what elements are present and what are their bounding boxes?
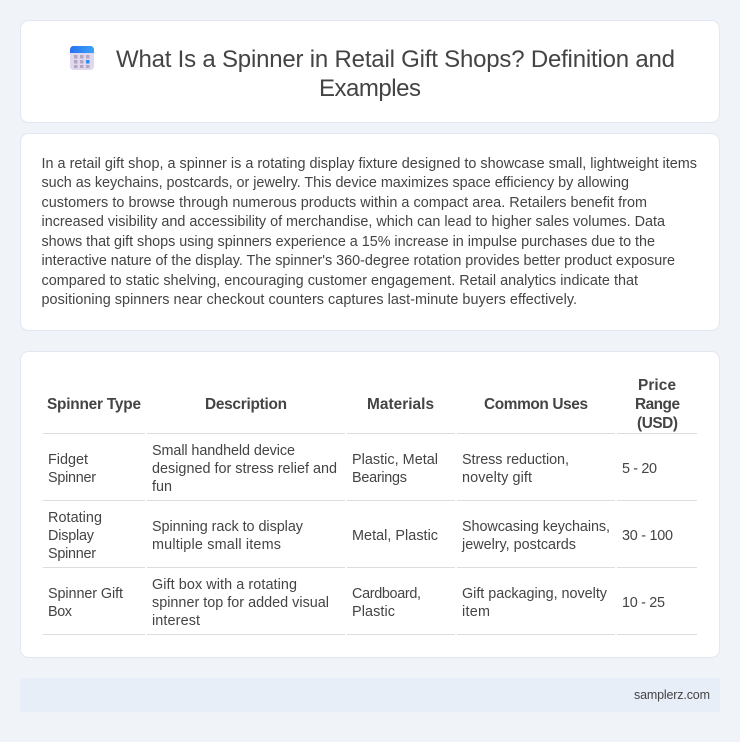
table header row: Description (205, 396, 287, 413)
table row: rotating display spinner: Spinner (48, 546, 96, 562)
table row: fidget spinner: Spinner (48, 470, 96, 486)
table row: spinner gift box (48, 577, 665, 629)
table row: rotating display spinner: Showcasing keychains, (462, 519, 610, 535)
table row: fidget spinner (48, 443, 657, 495)
table row: fidget spinner: novelty gift (462, 470, 532, 486)
text block: definition: shows that gift shops using spinners experience a 15% increase in impulse purchases due to the (42, 234, 655, 250)
table row: spinner gift box: Plastic (352, 604, 395, 620)
table row: rotating display spinner: jewelry, postcards (461, 537, 576, 553)
table header row: (USD) (637, 415, 678, 432)
table row: rotating display spinner: Spinning rack to display (152, 519, 304, 535)
text block: definition: positioning spinners near checkout counters captures last-minute buyers effectively. (42, 292, 577, 308)
table row: rotating display spinner: multiple small items (152, 537, 281, 553)
table row: spinner gift box: Gift packaging, novelty (462, 586, 608, 602)
text block: definition: In a retail gift shop, a spinner is a rotating display fixture designed to showcase small, lightweight items (42, 156, 697, 172)
table row: rotating display spinner: Rotating (48, 510, 102, 526)
table row: rotating display spinner: Metal, Plastic (352, 528, 438, 544)
panel: spinner types table (20, 352, 720, 658)
table row: spinner gift box: item (462, 604, 490, 620)
table row: spinner gift box: 10 - 25 (622, 595, 665, 611)
table row: fidget spinner: Plastic, Metal (352, 452, 438, 468)
text block: definition (42, 156, 697, 308)
table row: fidget spinner: designed for stress relief and (152, 461, 337, 477)
text block: definition: interactive nature of the display. The spinner's 360-degree rotation provides better product exposure (42, 253, 675, 269)
table row: spinner gift box: spinner top for added visual (152, 595, 329, 611)
table row: fidget spinner: 5 - 20 (622, 461, 657, 477)
title (116, 46, 675, 102)
table header row: Range (635, 396, 680, 413)
table row: fidget spinner: Stress reduction, (462, 452, 569, 468)
table row: spinner gift box: interest (152, 613, 200, 629)
table header row: Common Uses (484, 396, 588, 413)
table row: spinner gift box: Cardboard, (352, 586, 421, 602)
title: Examples (319, 75, 421, 102)
table row: spinner gift box: Spinner Gift (48, 586, 123, 602)
text block: definition: such as keychains, postcards, or jewelry. This device maximizes space efficiency by allowing (42, 175, 629, 191)
text block: definition: customers to browse through numerous products within a compact area. Retailers benefit from (42, 195, 647, 211)
table row: fidget spinner: Bearings (352, 470, 407, 486)
table row: rotating display spinner: 30 - 100 (622, 528, 673, 544)
table header row: Materials (367, 396, 434, 413)
table row: spinner gift box: Box (48, 604, 73, 620)
footer source text: samplerz.com (634, 688, 710, 702)
text block: definition: increased visibility and accessibility of merchandise, which can lead to higher sales volumes. Data (42, 214, 665, 230)
table header row (47, 377, 680, 432)
footer bar (20, 678, 720, 712)
table row: rotating display spinner: Display (48, 528, 95, 544)
table header row: Spinner Type (47, 396, 141, 413)
table row: fidget spinner: Small handheld device (152, 443, 295, 459)
panel: definition paragraph (20, 134, 720, 330)
title: What Is a Spinner in Retail Gift Shops? Definition and (116, 46, 675, 73)
icon: calendar (70, 46, 94, 70)
table row: fidget spinner: Fidget (48, 452, 88, 468)
text block: definition: compared to static shelving, encouraging customer engagement. Retail analytics indicate that (42, 273, 638, 289)
panel: title header (20, 20, 720, 122)
table header row: Price (638, 377, 676, 394)
table row: fidget spinner: fun (152, 479, 172, 495)
table row: spinner gift box: Gift box with a rotating (152, 577, 297, 593)
table row: rotating display spinner (48, 510, 673, 562)
